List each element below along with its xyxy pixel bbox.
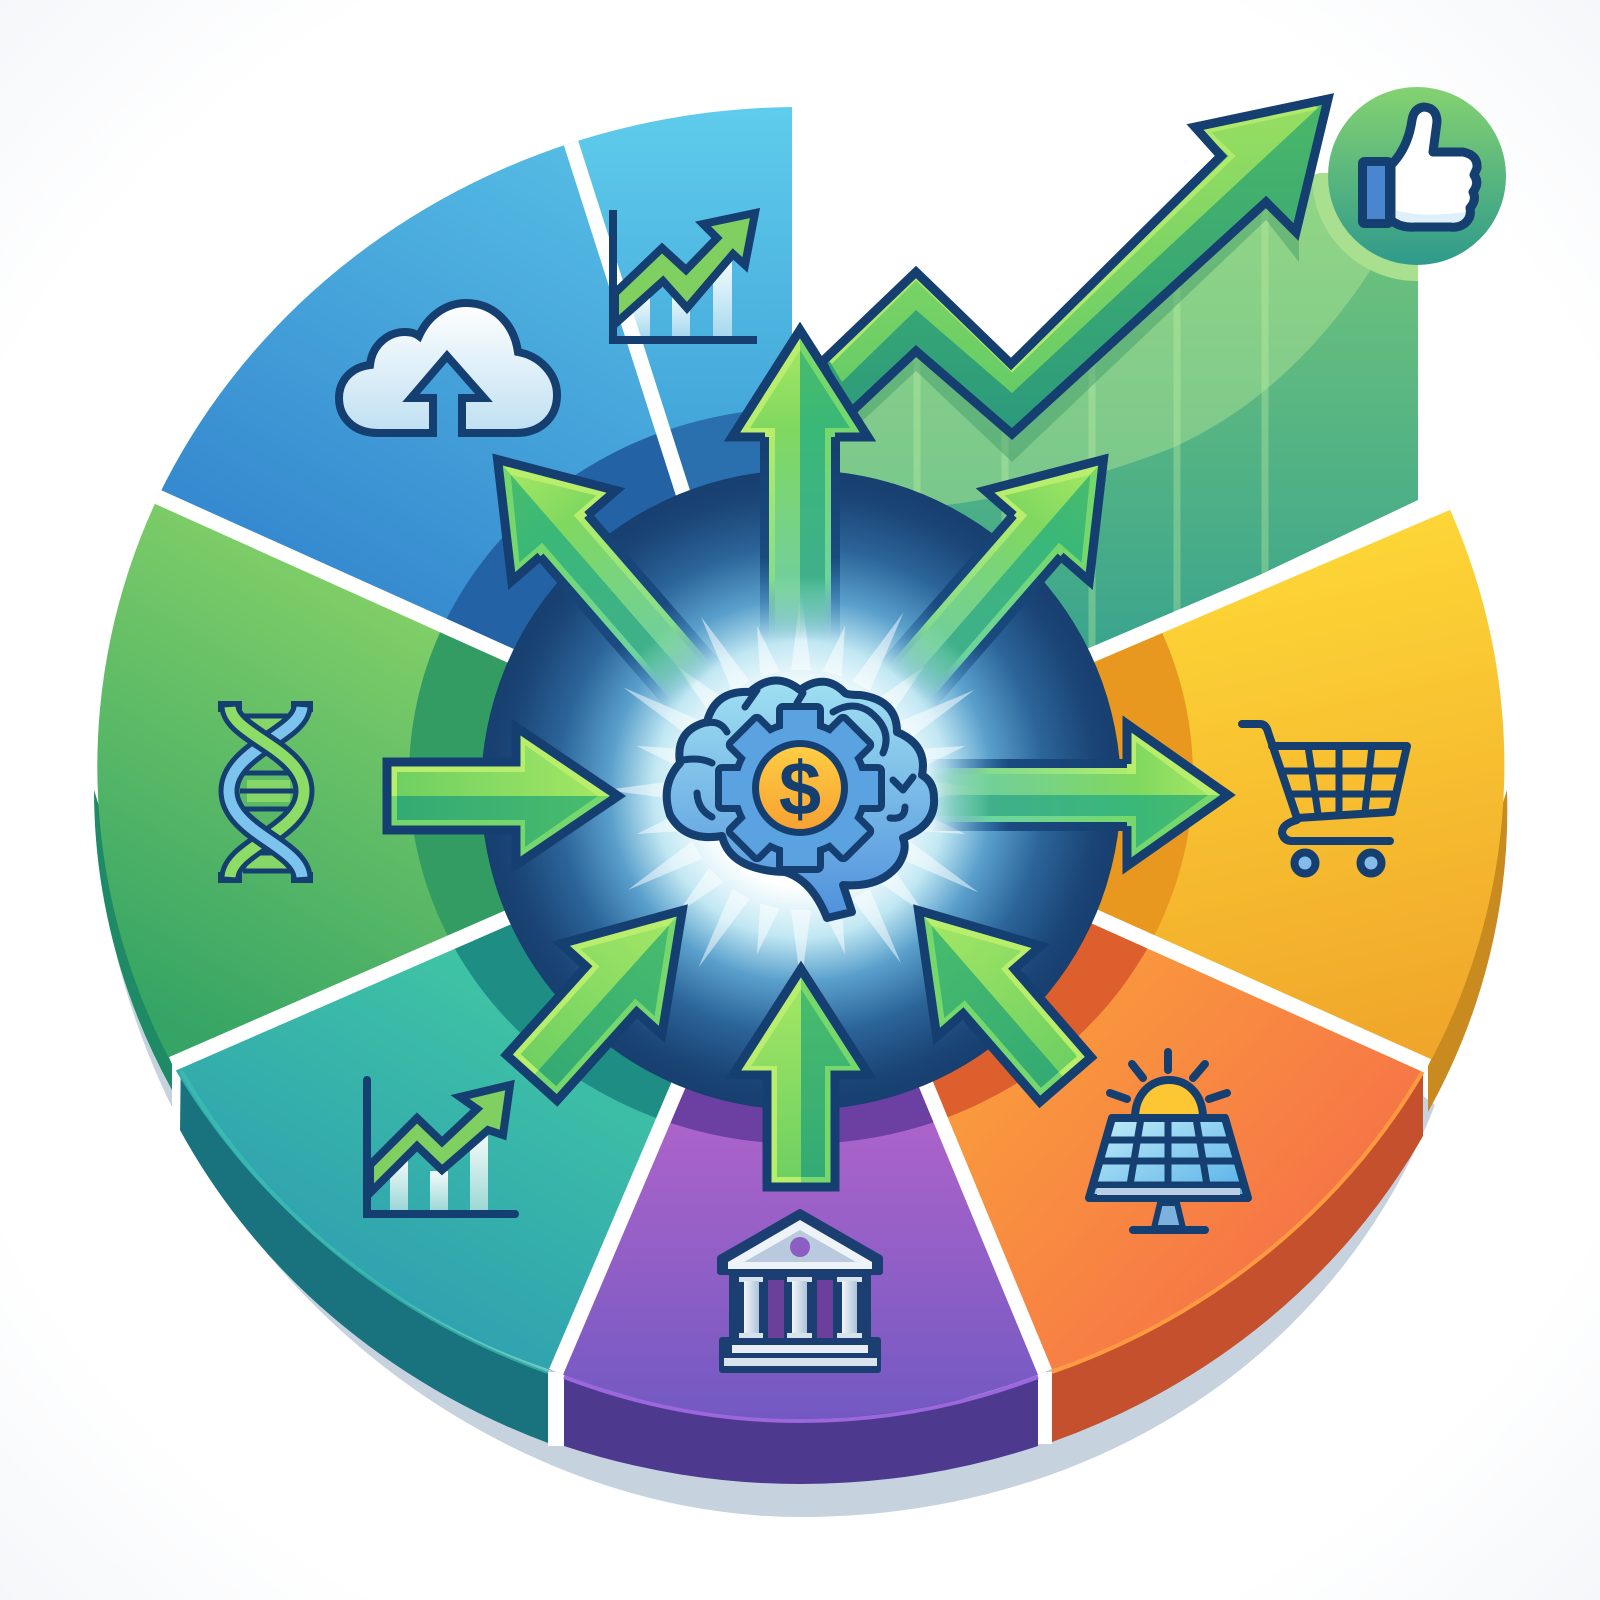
wedge: teal	[172, 924, 672, 1372]
pie drop shadow	[105, 900, 1435, 1517]
icon: dna helix	[218, 706, 313, 878]
wedge rim highlights	[181, 1071, 1423, 1421]
arrow: up	[732, 330, 868, 640]
wedge: green	[97, 497, 508, 1062]
arrow: lower-left inward	[481, 865, 733, 1123]
icon: bank building	[720, 1212, 880, 1370]
starburst rays	[606, 590, 996, 985]
wedge: yellow	[1094, 503, 1504, 1066]
icon: shopping cart	[1242, 724, 1407, 874]
arrow: lower-right inward	[866, 865, 1118, 1125]
icon: solar panel	[1089, 1052, 1248, 1230]
growth chart area	[840, 173, 1418, 648]
wedge: blue	[158, 143, 676, 649]
brain folds	[683, 690, 913, 818]
icon: chart in teal wedge	[367, 1080, 515, 1214]
pie side faces	[94, 790, 1507, 1484]
wedge: purple	[556, 1087, 1045, 1419]
wedge: light blue	[571, 107, 792, 490]
arrow: right	[928, 724, 1228, 866]
rising zigzag arrow	[822, 99, 1328, 462]
icon: cloud upload	[339, 303, 557, 433]
arrow: up-left	[445, 414, 746, 731]
central hub	[481, 470, 1121, 1110]
dollar coin	[756, 744, 844, 832]
dollar sign: $	[779, 747, 821, 832]
gear	[722, 710, 878, 866]
wedge: orange	[932, 924, 1428, 1372]
icon: brain with gear and dollar coin	[667, 680, 934, 918]
icon: chart in light blue wedge	[613, 210, 757, 340]
icon: thumbs up badge	[1328, 87, 1506, 265]
arrow: up-right	[855, 414, 1156, 731]
arrow: left inward	[387, 727, 618, 865]
segment dividers	[158, 143, 1447, 1372]
arrow: bottom inward	[733, 969, 869, 1187]
